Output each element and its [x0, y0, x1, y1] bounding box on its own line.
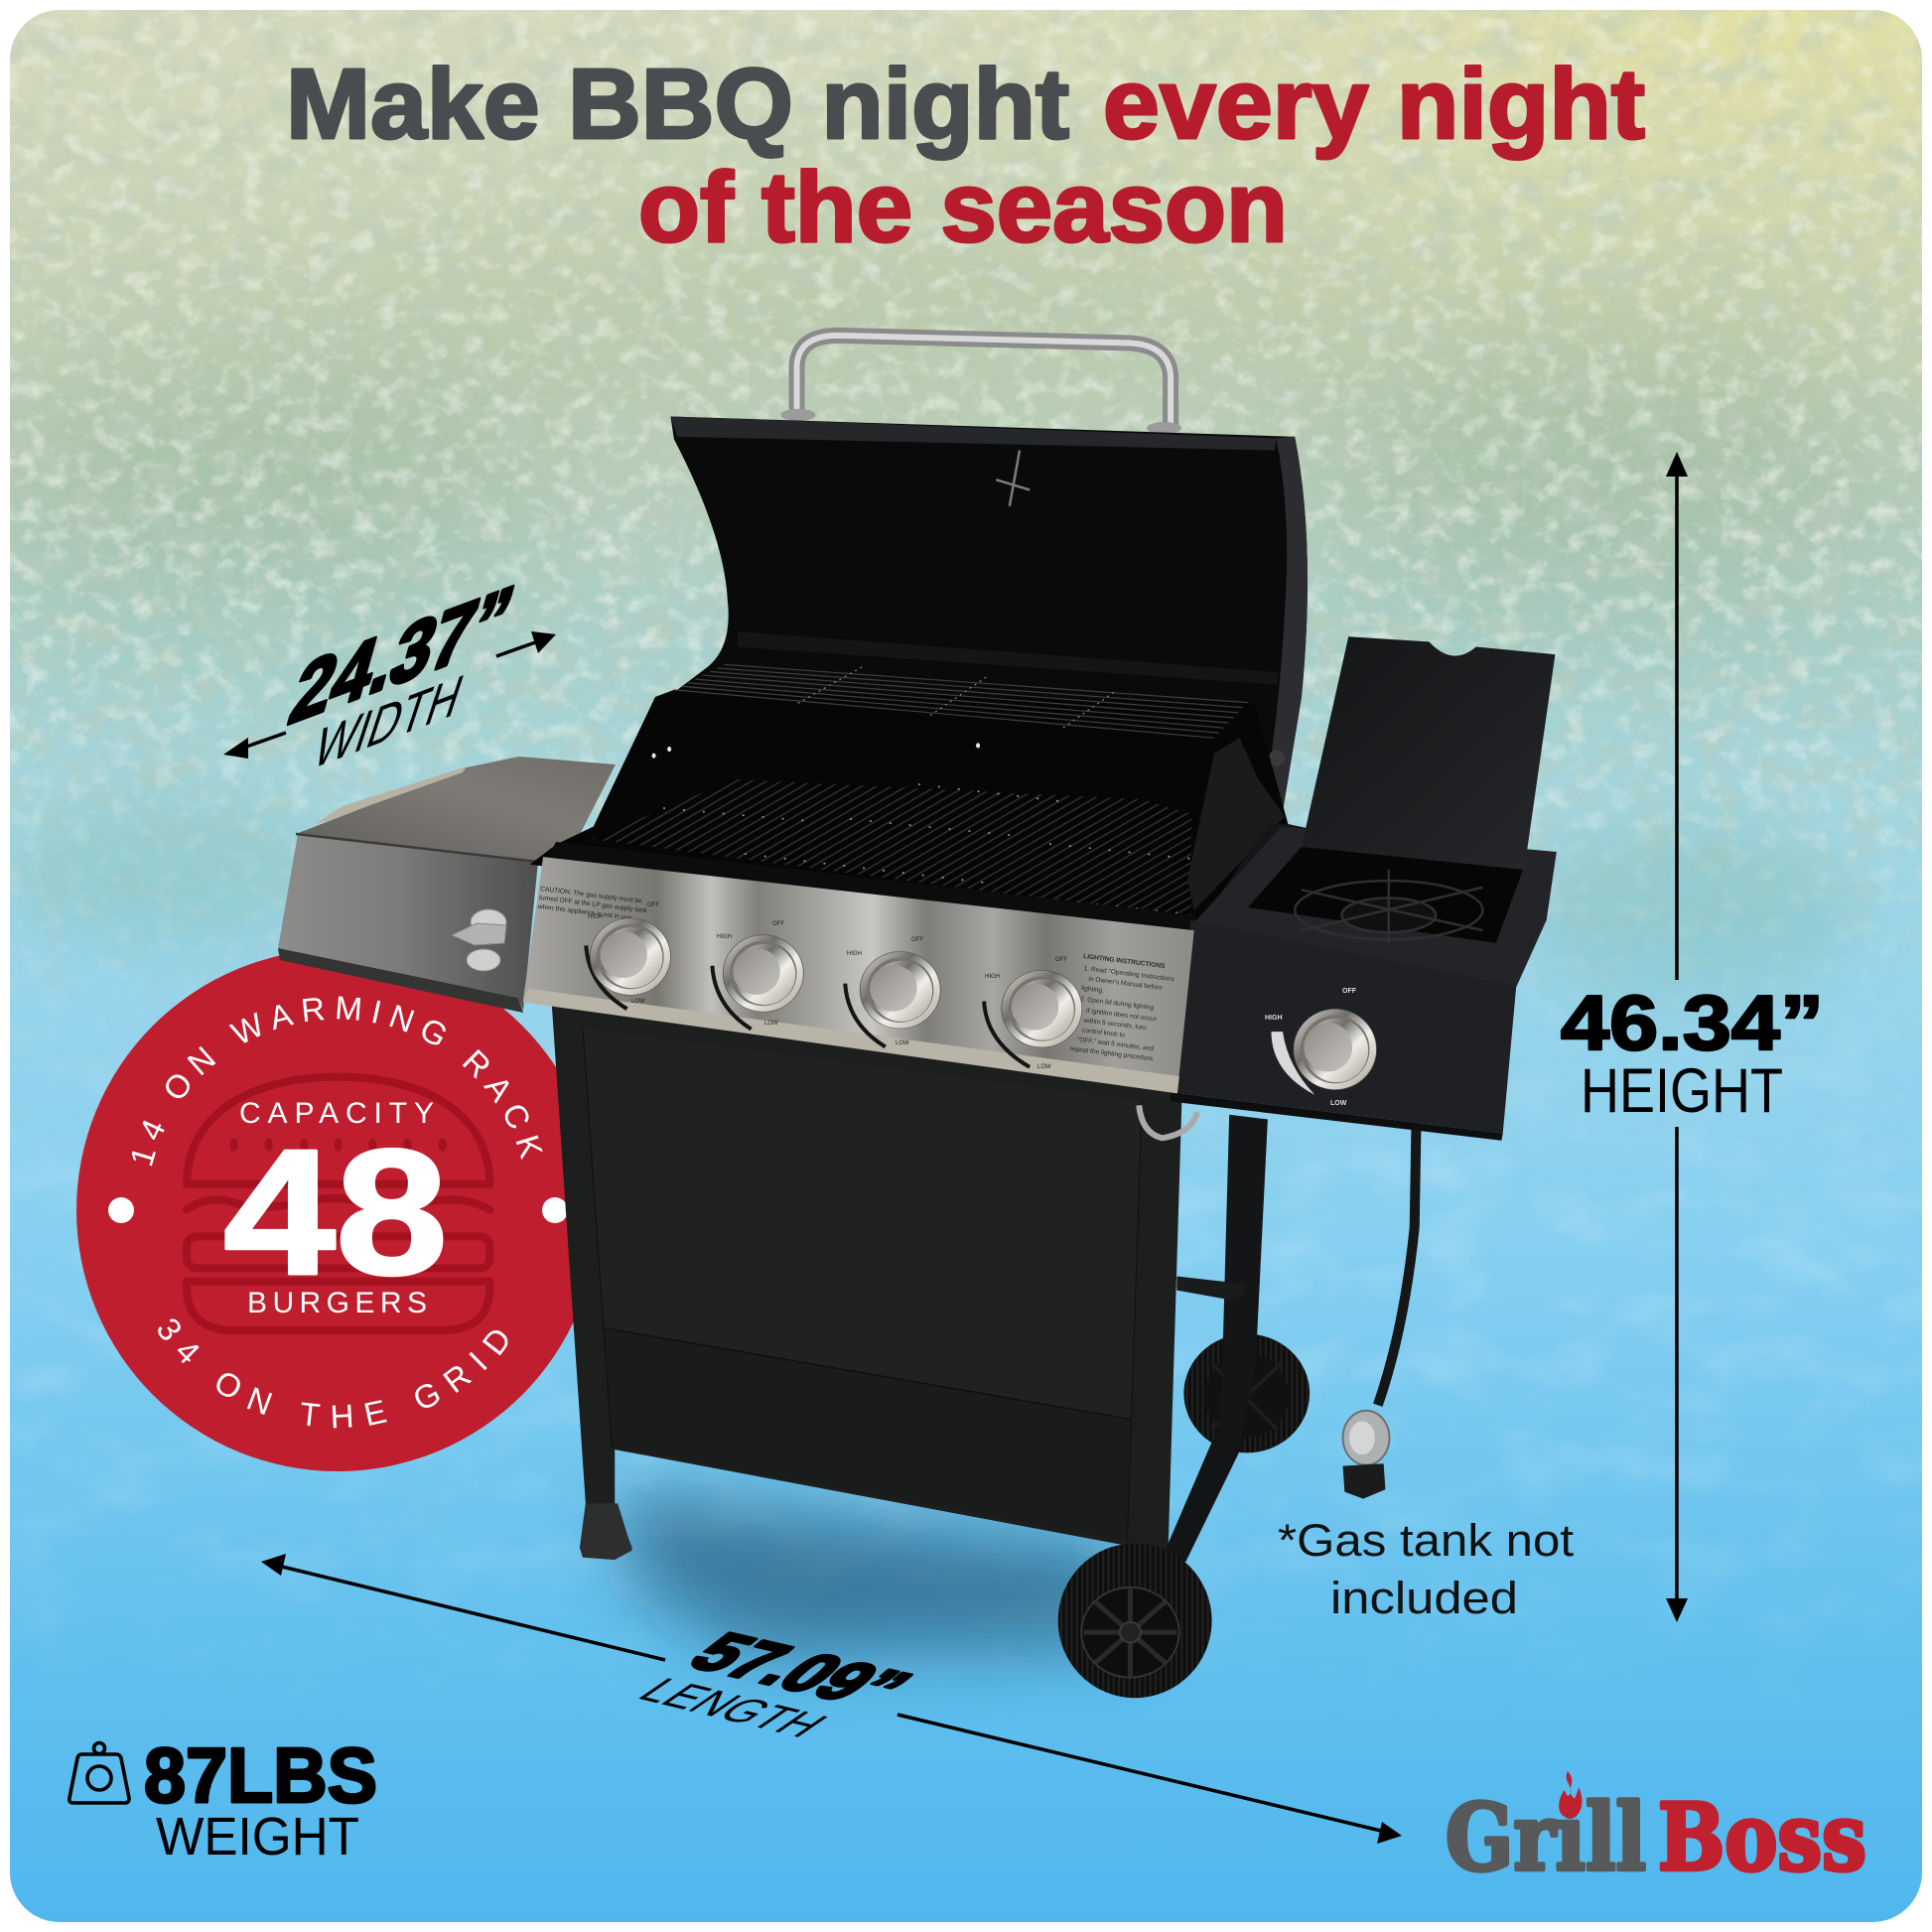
- arrow: height down: [1666, 1127, 1688, 1622]
- knob labels: LOW: [896, 1040, 909, 1046]
- side knob scale: [1271, 1032, 1314, 1095]
- badge dot right: [542, 1197, 568, 1223]
- caution text: CAUTION: The gas supply must be: [540, 886, 642, 905]
- burner cover: [1302, 636, 1555, 870]
- badge arc text: warming rack: 14 ON WARMING RACK: [131, 997, 543, 1166]
- weight label: WEIGHT: [156, 1807, 359, 1866]
- length dimension: LENGTH: [626, 1671, 841, 1744]
- title: Make BBQ night: [286, 49, 1069, 160]
- side front panel: [1171, 920, 1516, 1134]
- title: [286, 49, 1645, 263]
- arrow: height up: [1666, 452, 1688, 980]
- burner recess: [1248, 847, 1523, 943]
- gas tank note: included: [1330, 1573, 1518, 1623]
- length dimension: [261, 1554, 1402, 1844]
- warming rack: [674, 664, 1248, 738]
- shelf top: [1194, 827, 1557, 987]
- burner: [1295, 870, 1482, 943]
- small screw highlights: [652, 743, 980, 759]
- logo: GrillBoss: Grill: [1446, 1783, 1646, 1891]
- badge arc text: on the grid: 34 ON THE GRID: [158, 1318, 508, 1428]
- capacity badge: [76, 952, 574, 1471]
- weight value: 87LBS: [144, 1731, 377, 1819]
- height dimension: HEIGHT: [1581, 1056, 1783, 1126]
- badge label: capacity: CAPACITY: [239, 1097, 434, 1130]
- lid, firebox and racks: [530, 336, 1308, 945]
- lighting instructions: within 5 seconds, turn: [1082, 1017, 1147, 1032]
- arrow: width right: [496, 631, 556, 656]
- title: every night: [1103, 49, 1645, 160]
- arrow: length left: [261, 1554, 665, 1660]
- length dimension: 57.09”: [672, 1622, 928, 1720]
- wheel strut and front wheel: [1058, 1429, 1244, 1698]
- lighting instructions: LIGHTING INSTRUCTIONS: [1083, 953, 1166, 970]
- knob labels: OFF: [772, 921, 784, 927]
- cabinet: [551, 988, 1197, 1560]
- shelf latch: [452, 909, 506, 971]
- badge label: burgers: BURGERS: [247, 1287, 427, 1319]
- badge dot left: [108, 1197, 134, 1223]
- lighting instructions: 3. If ignition does not occur: [1078, 1007, 1158, 1024]
- firebox: [530, 690, 1288, 945]
- lighting instructions: 1. Read "Operating Instructions: [1083, 965, 1175, 983]
- lighting instructions: repeat the lighting procedure.: [1069, 1045, 1155, 1063]
- cooking grates: [544, 738, 1311, 935]
- height dimension: [1561, 452, 1824, 1622]
- knob labels: HIGH: [847, 951, 862, 957]
- rear wheel and leg: [1176, 1115, 1310, 1452]
- side knob labels: [1265, 988, 1357, 1107]
- grill: [278, 336, 1557, 1698]
- lighting instructions: lighting.: [1081, 985, 1104, 995]
- width dimension: [223, 567, 556, 782]
- width dimension: WIDTH: [306, 661, 472, 782]
- lighting instructions: 2. Open lid during lighting: [1080, 996, 1155, 1012]
- lid handle: [780, 336, 1181, 434]
- side knob labels: OFF: [1342, 988, 1357, 995]
- side knob labels: LOW: [1330, 1100, 1347, 1107]
- arrow: length right: [897, 1715, 1402, 1844]
- icon: burger outline: [187, 1077, 489, 1330]
- knob labels: LOW: [1037, 1064, 1051, 1070]
- knob labels: HIGH: [717, 934, 732, 940]
- lighting instructions: "OFF," wait 5 minutes, and: [1076, 1036, 1155, 1052]
- height dimension: 46.34”: [1561, 979, 1824, 1066]
- knob labels: OFF: [647, 902, 659, 908]
- icon: flame: [1559, 1771, 1582, 1818]
- caution text: turned OFF at the LP gas supply tank: [539, 895, 648, 914]
- grate highlight dots: [663, 784, 1191, 913]
- caution text: [537, 886, 649, 923]
- lighting instructions: [1069, 953, 1176, 1064]
- logo: GrillBoss: Boss: [1658, 1783, 1866, 1891]
- side burner knob: [1294, 1009, 1376, 1090]
- knob labels: LOW: [631, 999, 645, 1005]
- side burner and shelf: [1171, 636, 1557, 1141]
- logo: GrillBoss: [1446, 1771, 1866, 1891]
- knob labels: HIGH: [985, 974, 1000, 980]
- grill ground shadow: [616, 1489, 1122, 1658]
- control knobs: [586, 918, 1082, 1067]
- title: of the season: [638, 152, 1288, 263]
- gas tank note: [1278, 1515, 1575, 1623]
- firebox right wall: [1187, 738, 1285, 910]
- arrow: width left: [223, 733, 286, 759]
- icon: weight: [69, 1743, 129, 1803]
- gas tank note: *Gas tank not: [1278, 1515, 1575, 1566]
- knob labels: OFF: [911, 937, 923, 943]
- lighting instructions: in Owner's Manual before: [1088, 976, 1164, 992]
- gas hose and regulator: [1343, 1124, 1417, 1499]
- badge number: 48: 48: [223, 1113, 448, 1312]
- stainless control panel: [523, 857, 1357, 1107]
- firebox front lip: [544, 842, 1196, 935]
- caution text: when this appliance is not in use: [537, 903, 632, 921]
- side knob labels: HIGH: [1265, 1015, 1283, 1022]
- left side shelf: [278, 757, 616, 1013]
- width dimension: 24.37”: [281, 567, 523, 744]
- knob labels: LOW: [764, 1021, 778, 1027]
- open lid: [670, 416, 1308, 816]
- weight: [69, 1731, 377, 1866]
- lighting instructions: control knob to: [1082, 1027, 1126, 1039]
- knob labels: OFF: [1055, 957, 1067, 963]
- knob labels: HIGH: [588, 914, 603, 920]
- knob labels: [588, 902, 1067, 1070]
